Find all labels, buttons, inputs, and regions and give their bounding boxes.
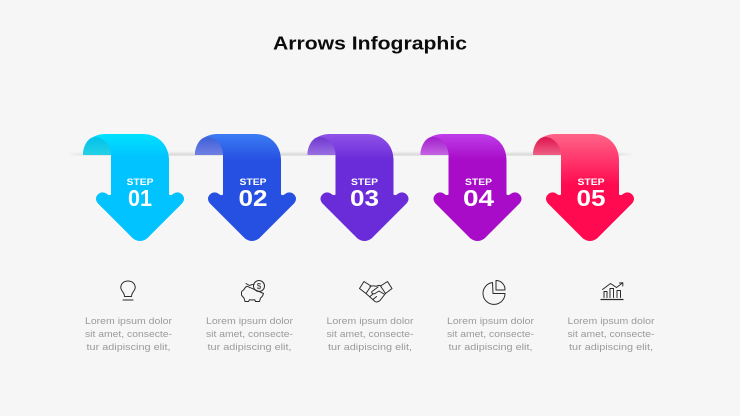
icon: pie chart [483,280,505,304]
step label: STEP [351,177,379,188]
text block: step 04 description: tur adipiscing elit, [448,342,532,353]
arrow: step 01 [83,134,184,241]
ribbon fold [420,137,448,155]
ribbon fold [83,137,111,155]
text block: step 01 description: sit amet, consecte- [85,329,172,340]
step label: STEP [126,177,154,188]
step number: 04 [463,185,494,211]
ribbon and arrow body [420,134,522,241]
text block: step 03 description: tur adipiscing elit, [328,342,412,353]
ribbon fold [308,137,336,155]
text block: step 02 description: Lorem ipsum dolor [206,316,294,327]
icon: handshake [360,282,392,302]
icon: piggy bank with coin [242,280,264,302]
text block: step 04 description: Lorem ipsum dolor [447,316,535,327]
step number: 05 [577,185,605,211]
text block: step 01 description: tur adipiscing elit, [86,342,170,353]
step number: 02 [239,185,267,211]
ribbon fold [533,137,561,155]
text block: step 04 description: sit amet, consecte- [447,329,534,340]
step label: STEP [465,177,493,188]
text block: step 05 description: Lorem ipsum dolor [568,316,655,327]
arrow: step 04 [420,134,522,241]
text block: step 03 description: Lorem ipsum dolor [326,316,414,327]
arrow: step 05 [533,134,634,241]
text block: step 01 description: Lorem ipsum dolor [85,316,173,327]
icon: piggy bank with coin: $ [257,282,262,291]
text block: step 02 description: tur adipiscing elit, [208,342,292,353]
ribbon and arrow body [83,134,184,241]
arrow: step 02 [195,134,296,241]
ribbon and arrow body [308,134,409,241]
step label: STEP [240,177,267,188]
step number: 01 [128,185,152,211]
text block: step 05 description: sit amet, consecte- [568,329,654,340]
icon: light bulb [121,281,135,300]
ribbon fold [195,137,223,155]
step label: STEP [578,177,605,188]
text block: step 02 description: sit amet, consecte- [206,329,293,340]
title: Arrows Infographic [273,32,467,54]
step number: 03 [350,185,379,211]
icon: growth bar chart [601,283,623,300]
ribbon and arrow body [195,134,296,241]
arrow: step 03 [308,134,409,241]
text block: step 05 description: tur adipiscing elit, [569,342,653,353]
horizontal shelf line [68,151,634,156]
text block: step 03 description: sit amet, consecte- [326,329,414,340]
ribbon and arrow body [533,134,634,241]
